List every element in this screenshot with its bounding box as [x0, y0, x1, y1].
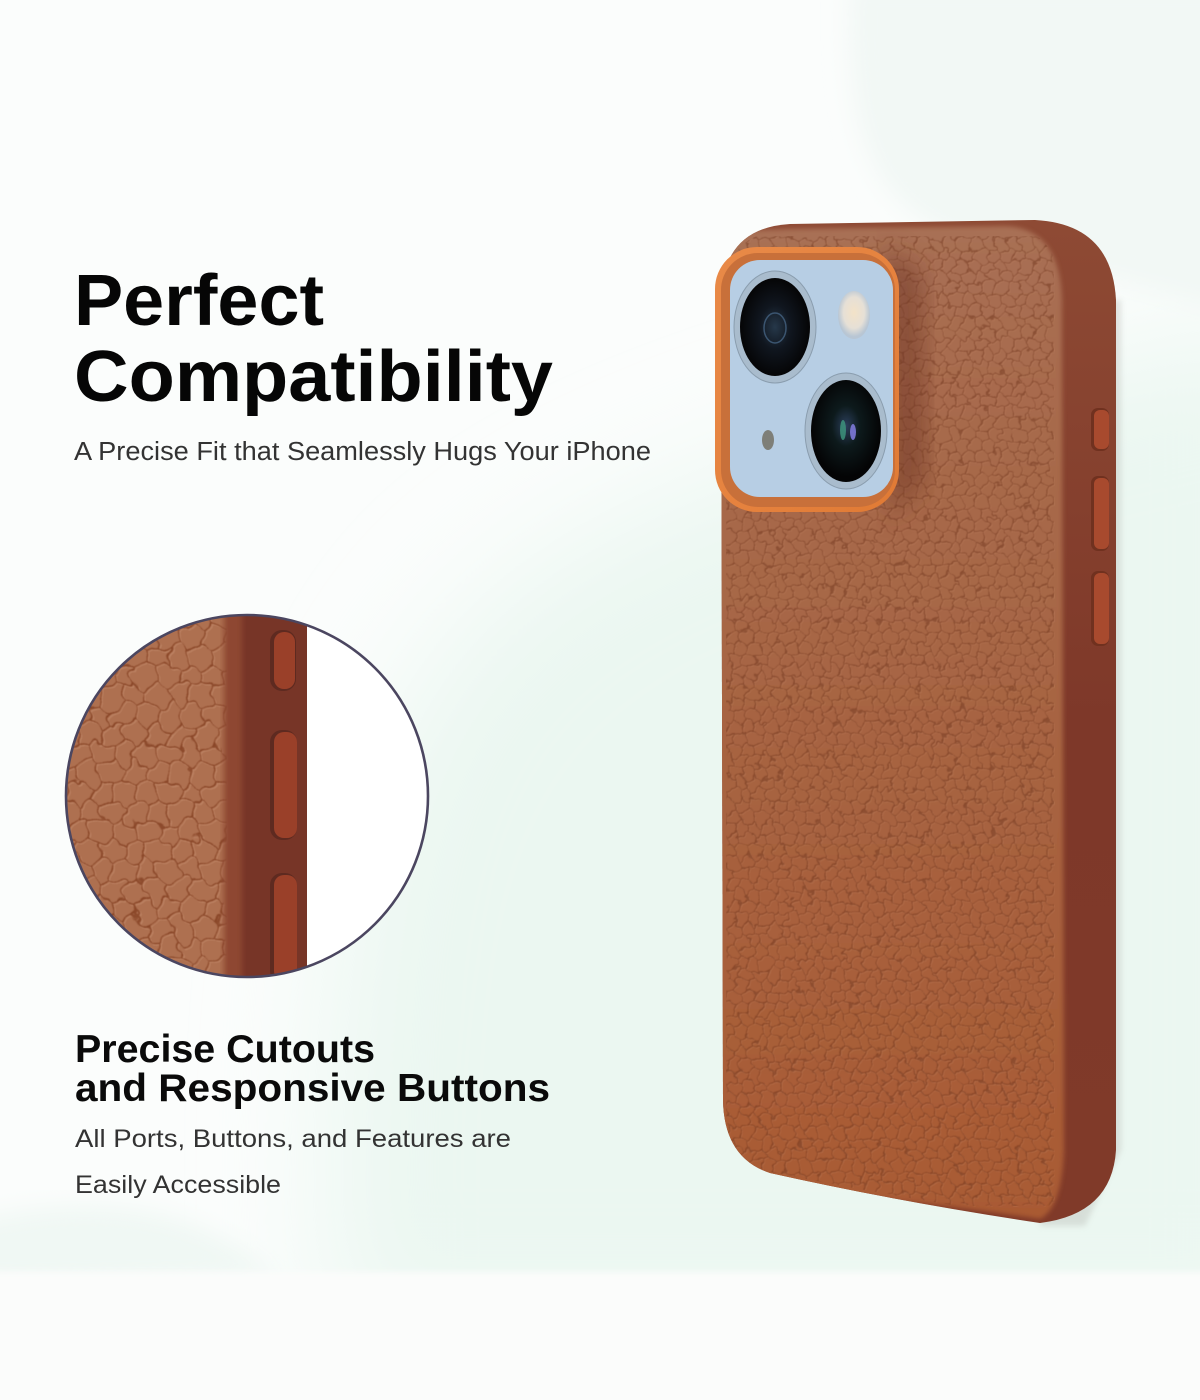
title: Perfect: [74, 261, 324, 341]
back face: [700, 226, 1064, 1219]
circle leather: [67, 618, 228, 974]
title: Compatibility: [74, 337, 553, 417]
feature heading: [75, 1028, 550, 1110]
feature description: Easily Accessible: [75, 1171, 281, 1199]
title: [74, 261, 553, 417]
flash: [838, 291, 870, 339]
cast shadow: [1040, 300, 1121, 1226]
microphone: [762, 430, 774, 450]
feature heading: Precise Cutouts: [75, 1028, 375, 1071]
side buttons: [1091, 408, 1109, 646]
camera shadow: [885, 245, 926, 520]
camera glass: [730, 260, 893, 497]
subtitle: A Precise Fit that Seamlessly Hugs Your iPhone: [74, 438, 651, 466]
lens: ultra wide: [805, 373, 887, 489]
camera surround: [715, 247, 899, 512]
lens: main: [734, 271, 816, 383]
feature description: All Ports, Buttons, and Features are: [75, 1125, 511, 1153]
detail circle: [55, 600, 428, 995]
phone case: [700, 220, 1121, 1226]
side band: [721, 220, 1116, 1223]
feature description: [75, 1125, 511, 1199]
circle buttons: [270, 630, 297, 983]
leather grain: [726, 236, 1055, 1207]
feature heading: and Responsive Buttons: [75, 1067, 550, 1110]
circle side band: [237, 616, 307, 976]
